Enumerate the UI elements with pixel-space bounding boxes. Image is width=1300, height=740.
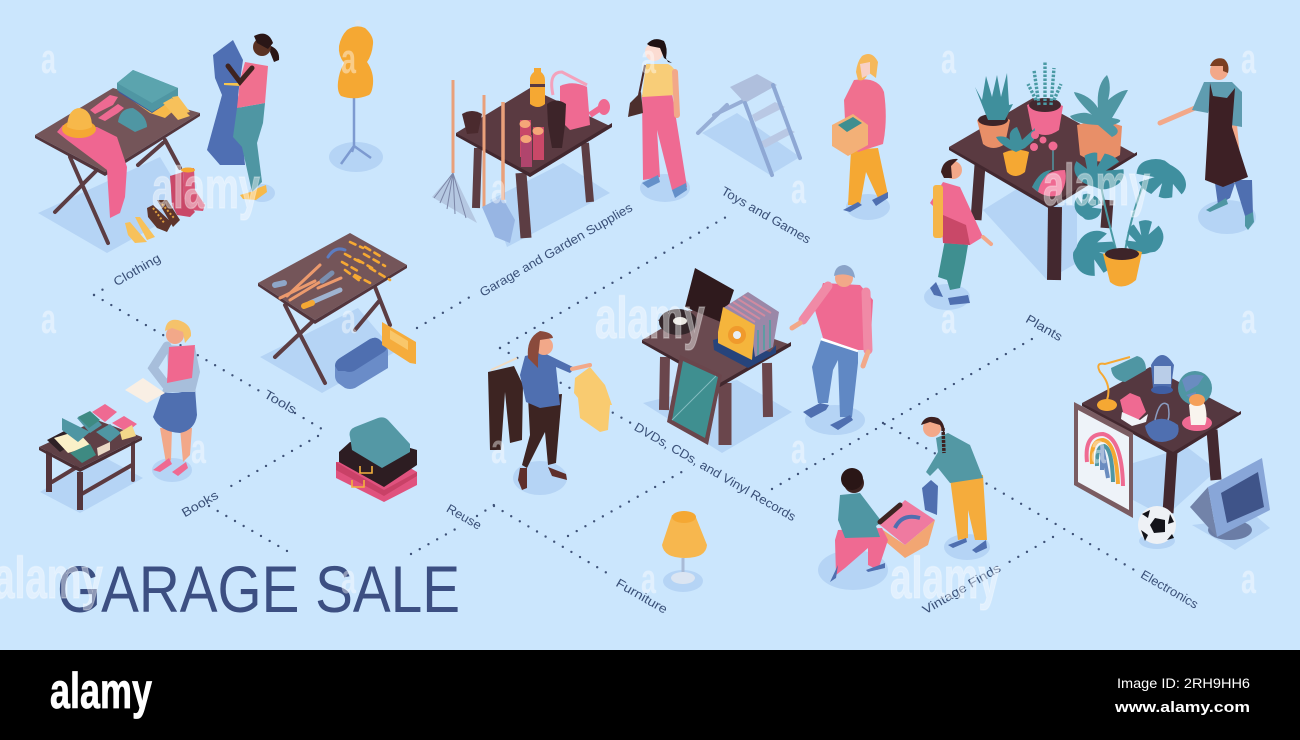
label: Garage and Garden Supplies: Garage and Garden Supplies: [477, 200, 635, 300]
section: plants table: [949, 62, 1192, 287]
stacked suitcases: [336, 417, 417, 502]
leafy plant in terracotta pot: [1070, 75, 1128, 162]
yellow heels on floor: [125, 217, 155, 243]
section: garden table: [432, 68, 612, 247]
watermark overlay: a: [341, 35, 356, 82]
watermark overlay: a: [941, 35, 956, 82]
soccer ball: [1138, 506, 1176, 549]
cardboard box: [880, 500, 935, 558]
watermark overlay: alamy: [595, 286, 705, 351]
section: vintage table: [1074, 355, 1270, 550]
rake: [432, 80, 477, 223]
open book: [125, 378, 165, 403]
orchid on table: [1032, 142, 1066, 196]
torso: [162, 345, 200, 392]
orange bottle: [530, 68, 545, 107]
arms: [228, 66, 252, 82]
pink sneakers: [90, 95, 124, 121]
pink watering can: [552, 72, 610, 130]
figure: woman in yellow trousers: [921, 417, 990, 560]
teal cap: [118, 108, 147, 132]
watermark overlay: a: [941, 295, 956, 342]
watermark overlay: a: [1241, 295, 1256, 342]
watermark overlay: alamy: [1043, 153, 1150, 218]
dark trousers on hanger: [488, 358, 523, 450]
figure: man in apron: [1160, 58, 1256, 234]
watermark overlay: a: [191, 425, 206, 472]
watermark overlay: a: [491, 165, 506, 212]
brown boots: [147, 200, 180, 232]
blue skirt: [153, 388, 197, 433]
section: vinyl and mirror table: [642, 268, 792, 453]
pink toy horse: [1120, 393, 1148, 426]
title: GARAGE SALE: [57, 552, 460, 626]
section: clothing table: [35, 70, 205, 253]
head: [253, 38, 271, 56]
shovel: [482, 102, 515, 243]
globe: [1178, 371, 1212, 405]
lavender in pink pot: [1027, 62, 1063, 135]
legs: [160, 428, 192, 463]
watermark overlay: a: [791, 425, 806, 472]
figure: woman holding dress: [207, 34, 279, 202]
oil lantern: [1151, 355, 1174, 394]
watermark overlay: a: [1241, 35, 1256, 82]
pink top: [237, 62, 268, 108]
watermark overlay: a: [1091, 425, 1106, 472]
watermark overlay: a: [341, 295, 356, 342]
yellow tool case: [382, 322, 416, 364]
blue dress: [207, 40, 245, 165]
label: Electronics: Electronics: [1138, 567, 1201, 612]
figure: woman with hanging clothes: [488, 331, 612, 495]
figure: person kneeling at box: [818, 468, 935, 590]
watermark overlay: a: [341, 555, 356, 602]
label: Reuse: Reuse: [444, 501, 484, 533]
section: books table: [39, 404, 143, 513]
watermark overlay: a: [791, 165, 806, 212]
figure: woman in pink top: [924, 159, 991, 310]
red rain boots: [183, 168, 205, 211]
footer bar: [0, 650, 1300, 740]
hat and pink cloth: [57, 125, 127, 218]
CRT monitor: [1190, 458, 1270, 550]
small yellow pot with flowers: [996, 127, 1046, 176]
watermark overlay: a: [41, 295, 56, 342]
label: Toys and Games: Toys and Games: [719, 184, 813, 247]
folded shirts: [117, 70, 178, 118]
yellow shirt on hanger: [574, 367, 612, 432]
figure: man with cap: [792, 265, 873, 435]
yellow heels: [163, 96, 190, 120]
label: Clothing: Clothing: [111, 251, 163, 289]
aloe in terracotta pot: [975, 73, 1013, 148]
image id: Image ID: 2RH9HH6: [1117, 675, 1250, 691]
teal trousers: [233, 103, 265, 192]
figure: woman carrying box: [832, 54, 890, 220]
desk lamp: [1097, 356, 1146, 411]
head: [166, 326, 184, 344]
watermark overlay: a: [41, 35, 56, 82]
mannequin: [329, 20, 383, 172]
section: tools table: [258, 233, 407, 393]
watermark overlay: alamy: [152, 156, 260, 221]
footer logo: alamy: [50, 663, 152, 719]
garden fork: [482, 95, 486, 207]
watermark overlay: alamy: [890, 546, 1000, 611]
step ladder: [698, 74, 800, 175]
blue suitcase: [335, 338, 388, 389]
vinyl crate: [713, 292, 779, 368]
label: Tools: Tools: [262, 387, 299, 417]
framed rainbow picture: [1074, 402, 1133, 518]
figure: woman in pink trousers: [628, 39, 690, 202]
watermark overlay: a: [491, 425, 506, 472]
label: Plants: Plants: [1023, 312, 1065, 344]
label: DVDs, CDs, and Vinyl Records: DVDs, CDs, and Vinyl Records: [632, 420, 798, 524]
label: Furniture: Furniture: [614, 576, 670, 617]
monstera in yellow pot: [1070, 151, 1192, 287]
flower pot: [462, 111, 482, 134]
watermark overlay: a: [641, 35, 656, 82]
watermark overlay: [0, 35, 1256, 611]
small jars: [520, 120, 544, 167]
watermark overlay: a: [1241, 555, 1256, 602]
lucky cat: [1182, 394, 1212, 431]
record player: [658, 268, 734, 344]
tools: hammers, pliers, saw: [275, 242, 390, 306]
label: Books: Books: [179, 488, 221, 520]
watermark overlay: a: [641, 555, 656, 602]
dotted connector network: [94, 213, 1136, 576]
book stacks: [47, 404, 137, 463]
standing mirror: [667, 355, 722, 445]
label: Vintage Finds: Vintage Finds: [920, 561, 1003, 617]
table lamp: [662, 511, 707, 592]
figure: blonde woman with book: [125, 320, 200, 482]
blue kettle: [1145, 403, 1179, 442]
site url: www.alamy.com: [1114, 699, 1250, 716]
stacked black pots: [547, 100, 566, 148]
